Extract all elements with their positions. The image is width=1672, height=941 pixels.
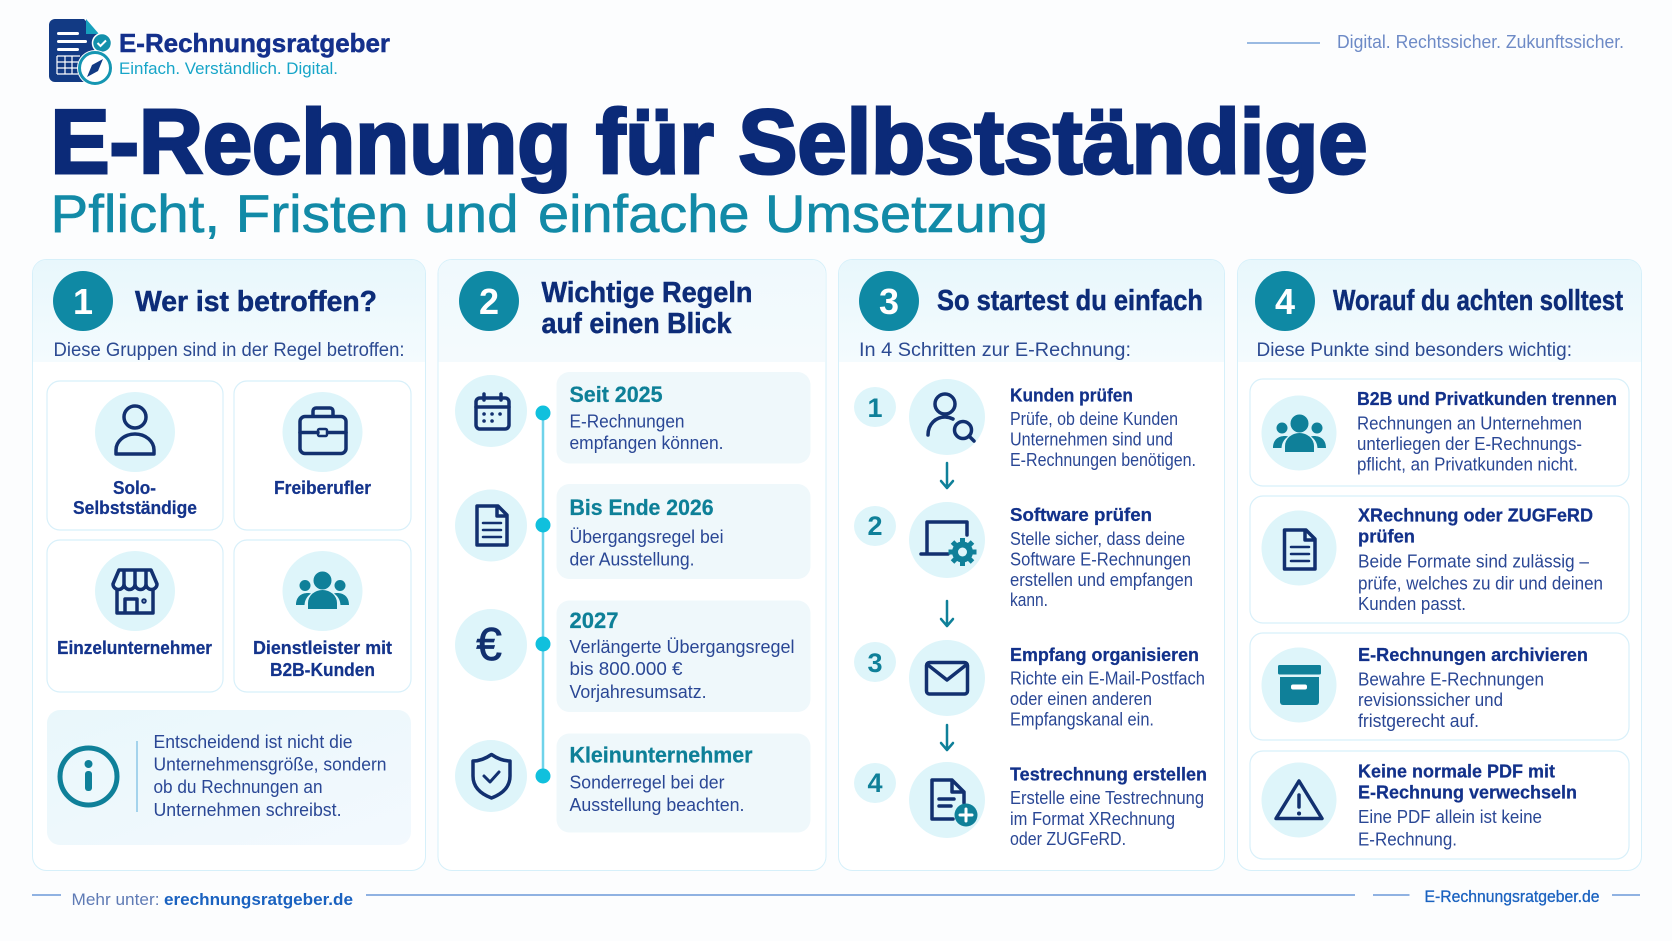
step text: oder einen anderen [1010, 689, 1152, 709]
footer link left: erechnungsratgeber.de [164, 890, 353, 909]
point text: pflicht, an Privatkunden nicht. [1357, 454, 1578, 474]
rule: Seit 2025 [455, 372, 810, 464]
point text: XRechnung oder ZUGFeRD [1358, 504, 1593, 526]
heading: Wichtige Regeln [542, 277, 752, 309]
label: Solo- [113, 478, 156, 498]
step text: Empfang organisieren [1010, 644, 1199, 665]
icon: user search [928, 394, 974, 441]
step text: Erstelle eine Testrechnung [1010, 788, 1204, 808]
rule text: empfangen können. [570, 433, 724, 453]
step 1 [854, 379, 1196, 470]
label: Selbstständige [73, 498, 197, 518]
step text: im Format XRechnung [1010, 809, 1175, 829]
top right claim: Digital. Rechtssicher. Zukunftssicher. [1337, 32, 1624, 52]
point: Formate [1250, 496, 1629, 623]
intro: Diese Punkte sind besonders wichtig: [1256, 340, 1572, 361]
label [73, 478, 197, 518]
rule text: Sonderregel bei der [570, 772, 725, 792]
icon: info [60, 748, 117, 805]
subtitle [50, 185, 1048, 244]
icon: mail [926, 662, 968, 694]
card: Einzelunternehmer [47, 540, 223, 692]
point text: Bewahre E-Rechnungen [1358, 670, 1544, 690]
icon: document [477, 506, 507, 545]
point text [1358, 644, 1588, 731]
step 2 [854, 502, 1193, 610]
rule text: Ausstellung beachten. [570, 795, 744, 815]
timeline [536, 406, 550, 784]
callout text: Entscheidend ist nicht die [154, 732, 352, 752]
step 2: 2 [867, 511, 883, 541]
point text: revisionssicher und [1358, 690, 1503, 710]
step text: kann. [1010, 590, 1048, 610]
icon: group [296, 572, 349, 609]
rule text: Übergangsregel bei [570, 527, 724, 547]
rule text: der Ausstellung. [570, 550, 694, 570]
subtitle: Pflicht, Fristen und [50, 185, 518, 244]
rule text [570, 382, 724, 453]
rule text: E-Rechnungen [570, 412, 684, 432]
point text: prüfen [1358, 526, 1415, 546]
rule: 2027 [455, 600, 810, 712]
intro: Diese Gruppen sind in der Regel betroffen: [54, 340, 404, 361]
rule: Bis Ende 2026 [455, 484, 810, 579]
panel 2 background [438, 260, 826, 870]
point: B2B [1250, 379, 1629, 486]
footer brand: E-Rechnungsratgeber.de [1424, 888, 1600, 906]
card: Solo-Selbstständige [47, 381, 223, 530]
subtitle: einfache Umsetzung [538, 185, 1048, 244]
icon: briefcase [300, 408, 346, 454]
icon: calendar [476, 394, 509, 429]
icon: document plus [932, 780, 978, 826]
point text [1358, 760, 1577, 850]
step text: erstellen und empfangen [1010, 570, 1193, 590]
point text [1357, 388, 1617, 474]
step text: Unternehmen sind und [1010, 430, 1173, 450]
intro: In 4 Schritten zur E-Rechnung: [859, 340, 1131, 361]
panel 4 background [1238, 260, 1642, 870]
point: PDF [1250, 751, 1629, 859]
footer link left: Mehr unter: [72, 890, 160, 909]
number badge 3 [859, 271, 919, 331]
callout text: ob du Rechnungen an [154, 777, 322, 797]
footer [32, 888, 1640, 909]
rule text [570, 742, 753, 815]
number badge 4: 4 [1275, 281, 1295, 322]
heading: auf einen Blick [542, 308, 732, 340]
heading: So startest du einfach [937, 285, 1203, 317]
rule text: Seit 2025 [570, 382, 662, 407]
point text: B2B und Privatkunden trennen [1357, 388, 1617, 409]
step text: Software prüfen [1010, 504, 1152, 525]
icon: laptop gear [921, 522, 976, 566]
heading: Wer ist betroffen? [135, 286, 377, 318]
panel: So startest du einfach [838, 260, 1224, 870]
panel 1 background [32, 260, 426, 870]
rule text: bis 800.000 € [570, 659, 682, 679]
arrow [941, 463, 953, 488]
icon: archive box [1278, 665, 1321, 705]
heading [542, 277, 752, 340]
card: Dienstleister [234, 540, 411, 692]
icon: euro: € [476, 618, 502, 670]
card: Freiberufler [234, 381, 411, 530]
panel: Worauf du achten solltest [1238, 260, 1642, 870]
point text: Eine PDF allein ist keine [1358, 807, 1542, 827]
point text: E-Rechnung verwechseln [1358, 782, 1577, 802]
rule text [570, 608, 794, 702]
logo [49, 19, 390, 86]
step text [1010, 504, 1193, 610]
icon: warning [1276, 781, 1322, 818]
point text: unterliegen der E-Rechnungs- [1357, 434, 1582, 454]
number badge 2 [459, 271, 519, 331]
footer link left [72, 890, 353, 909]
rule text: Bis Ende 2026 [570, 495, 714, 520]
step text: Empfangskanal ein. [1010, 710, 1154, 730]
arrow [941, 725, 953, 750]
number badge 4 [1255, 271, 1315, 331]
step text: oder ZUGFeRD. [1010, 829, 1126, 849]
step 4: 4 [867, 768, 883, 798]
rule text: Kleinunternehmer [570, 742, 753, 768]
rule text: 2027 [570, 608, 618, 633]
step text: Testrechnung erstellen [1010, 764, 1207, 784]
label: Einzelunternehmer [57, 638, 212, 658]
callout: info [47, 710, 411, 845]
arrow [941, 601, 953, 626]
label: Freiberufler [274, 478, 371, 498]
step 3 [854, 640, 1205, 730]
step text: E-Rechnungen benötigen. [1010, 450, 1196, 470]
step text [1010, 644, 1205, 730]
icon: store [113, 570, 157, 613]
icon: logo document [49, 19, 113, 86]
icon: shield [473, 754, 510, 798]
point text: Keine normale PDF mit [1358, 760, 1555, 782]
point text: prüfe, welches zu dir und deinen [1358, 574, 1603, 594]
icon: document [1284, 530, 1315, 569]
label [253, 638, 392, 680]
point text: Rechnungen an Unternehmen [1357, 414, 1582, 434]
callout text: Unternehmensgröße, sondern [154, 754, 386, 774]
icon: group [1273, 414, 1326, 452]
step text: Kunden prüfen [1010, 384, 1133, 406]
point text: fristgerecht auf. [1358, 711, 1479, 731]
label: Dienstleister mit [253, 638, 392, 658]
number badge 1 [53, 271, 113, 331]
label: B2B-Kunden [270, 660, 375, 680]
step text [1010, 384, 1196, 470]
point text [1358, 504, 1603, 614]
number badge 1: 1 [73, 281, 93, 322]
point text: Beide Formate sind zulässig – [1358, 552, 1589, 572]
panel 3 background [838, 260, 1224, 870]
callout text [154, 732, 386, 820]
number badge 3: 3 [879, 281, 899, 322]
step text: Richte ein E-Mail-Postfach [1010, 668, 1205, 688]
panel: Wichtige Regeln [438, 260, 826, 870]
logo tagline: Einfach. Verständlich. Digital. [119, 59, 338, 78]
rule text [570, 495, 724, 570]
step text: Software E-Rechnungen [1010, 550, 1191, 570]
point text: Kunden passt. [1358, 594, 1466, 614]
point: Archiv [1250, 633, 1629, 740]
title: E-Rechnung für Selbstständige [50, 92, 1368, 193]
number badge 2: 2 [479, 281, 499, 322]
callout text: Unternehmen schreibst. [154, 800, 342, 820]
logo name: E-Rechnungsratgeber [119, 28, 390, 58]
step 4 [854, 762, 1207, 849]
rule: Kleinunternehmer [455, 734, 810, 832]
panel: Wer ist betroffen [32, 260, 426, 870]
rule text: Vorjahresumsatz. [570, 682, 706, 702]
step 3: 3 [867, 648, 883, 678]
step text: Stelle sicher, dass deine [1010, 529, 1185, 549]
step text [1010, 764, 1207, 849]
step text: Prüfe, ob deine Kunden [1010, 409, 1178, 429]
point text: E-Rechnung. [1358, 830, 1457, 850]
icon: person [116, 406, 154, 454]
step 1: 1 [867, 393, 883, 423]
rule text: Verlängerte Übergangsregel [570, 637, 794, 657]
point text: E-Rechnungen archivieren [1358, 644, 1588, 665]
